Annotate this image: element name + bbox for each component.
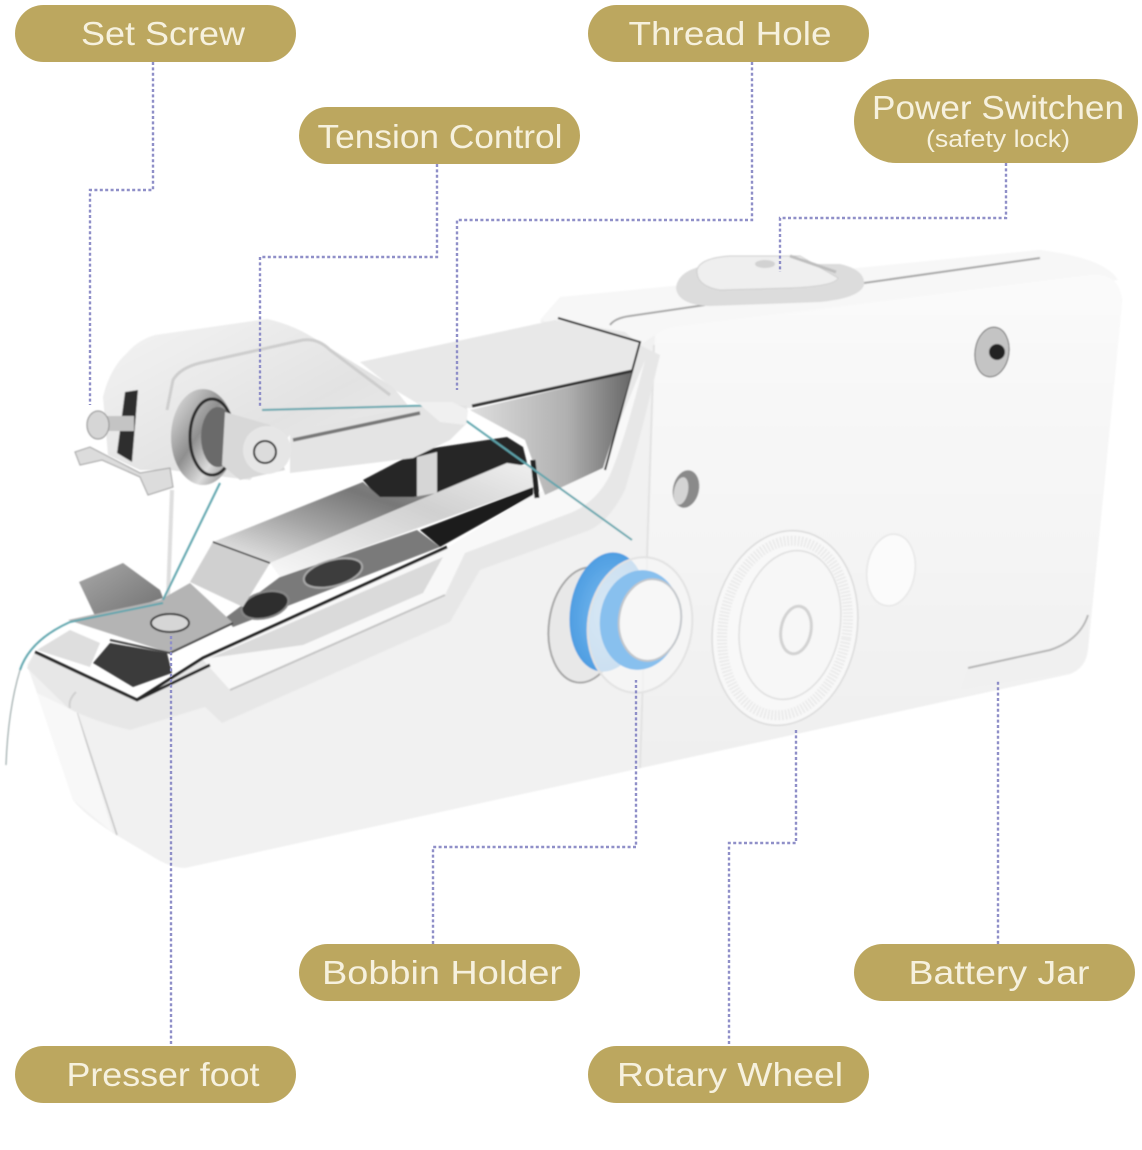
needle bar and slot (363, 437, 527, 500)
power button (862, 531, 920, 609)
front panel (640, 275, 1122, 768)
label: Power Switchen (safety lock): (safety lock) (926, 126, 1070, 153)
tension control knob (171, 389, 291, 485)
sewing machine (6, 250, 1122, 868)
label: Set Screw (15, 5, 296, 62)
tension arm (290, 405, 467, 473)
leader lines (90, 62, 1006, 1044)
bobbin holder (541, 547, 701, 700)
label: Presser foot: Presser foot (66, 1056, 260, 1093)
label: Thread Hole: Thread Hole (628, 15, 832, 52)
inner metal plate (470, 372, 632, 495)
steel lower plate (225, 530, 440, 627)
dark slot (558, 318, 640, 470)
arm casing (360, 320, 640, 408)
label: Power Switchen (safety lock) (854, 79, 1138, 163)
screw: body (972, 325, 1012, 379)
head cover (103, 319, 410, 480)
label: Thread Hole (588, 5, 869, 62)
steel top bar (213, 463, 507, 563)
screw: lower (669, 468, 703, 510)
label: Battery Jar: Battery Jar (908, 954, 1090, 991)
label: Presser foot (15, 1046, 296, 1103)
label: Bobbin Holder: Bobbin Holder (322, 954, 562, 991)
thread guide (417, 402, 468, 425)
power switch (676, 256, 864, 306)
machine body (27, 250, 1122, 868)
label: Rotary Wheel: Rotary Wheel (617, 1056, 843, 1093)
label: Tension Control: Tension Control (318, 118, 562, 155)
label: Bobbin Holder (299, 944, 580, 1001)
needle bar (417, 452, 437, 500)
label: Set Screw: Set Screw (81, 15, 245, 52)
thread (6, 405, 632, 765)
label: Rotary Wheel (588, 1046, 869, 1103)
rim around opening (27, 345, 660, 730)
set screw (75, 390, 173, 495)
rotary wheel (697, 519, 873, 737)
top plate (540, 250, 1118, 345)
label: Battery Jar (854, 944, 1135, 1001)
steel edge (137, 547, 447, 700)
label: Tension Control (299, 107, 580, 164)
presser foot (35, 563, 233, 700)
label: Power Switchen (safety lock): Power Switchen (872, 89, 1124, 126)
